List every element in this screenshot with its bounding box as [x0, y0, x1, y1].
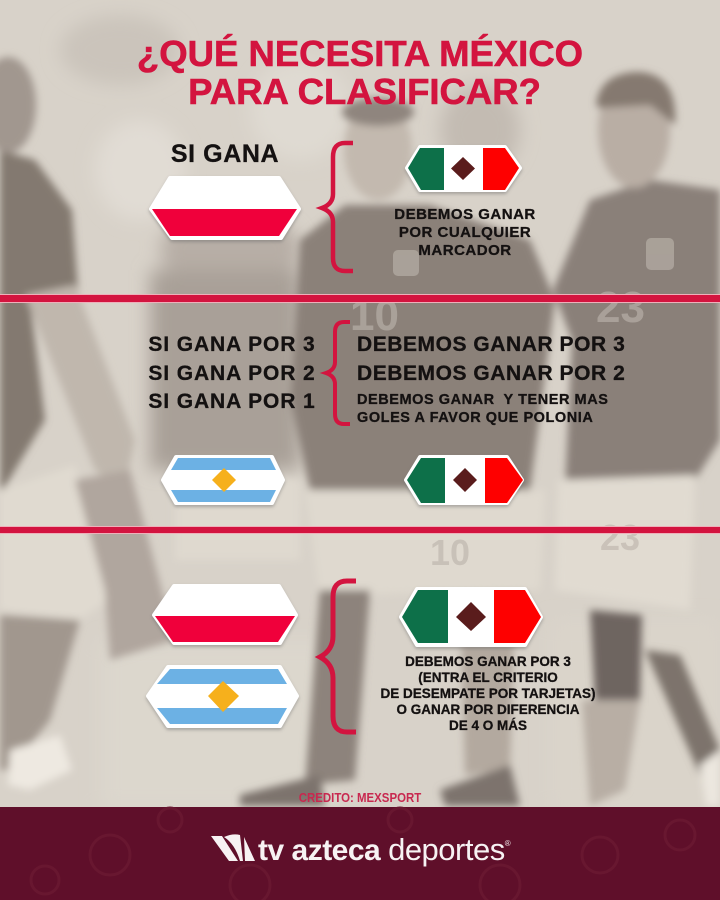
text: third scenario result: O GANAR POR DIFERENCIA [396, 702, 580, 717]
text: first scenario result: DEBEMOS GANAR [394, 206, 536, 223]
title: ¿QUÉ NECESITA MÉXICO [137, 33, 583, 74]
text: second scenario results [357, 333, 625, 384]
shirt numbers, crests: 23 [596, 283, 645, 332]
text: second scenario conditions: SI GANA POR 1 [148, 390, 316, 413]
text: third scenario result [380, 654, 596, 733]
heading: si gana: SI GANA [171, 140, 279, 168]
text: first scenario result [394, 206, 536, 259]
title [137, 33, 583, 112]
text: second scenario tiebreak [357, 392, 608, 426]
shirt numbers, crests: 10 [350, 291, 399, 340]
section divider 1 [0, 295, 720, 302]
text: second scenario tiebreak: GOLES A FAVOR QUE POLONIA [357, 410, 593, 426]
photo credit: CREDITO: MEXSPORT [299, 790, 421, 805]
title: PARA CLASIFICAR? [188, 71, 541, 112]
shirt numbers, crests [350, 238, 674, 573]
section divider 2 [0, 527, 720, 533]
shirt numbers, crests: 10 [430, 532, 470, 573]
text: third scenario result: DE 4 O MÁS [449, 718, 527, 733]
footer band [0, 807, 720, 900]
text: first scenario result: MARCADOR [418, 242, 512, 259]
text: second scenario conditions: SI GANA POR 3 [148, 333, 316, 356]
footer logo: tv azteca deportes [211, 832, 510, 867]
text: third scenario result: (ENTRA EL CRITERIO [418, 670, 558, 685]
text: first scenario result: POR CUALQUIER [399, 224, 531, 241]
text: second scenario tiebreak: DEBEMOS GANAR Y TENER MAS [357, 392, 608, 408]
footer pattern [31, 808, 695, 900]
shirt numbers, crests: 23 [600, 517, 640, 558]
text: second scenario conditions: SI GANA POR 2 [148, 362, 316, 384]
text: second scenario conditions [148, 333, 316, 413]
icon: tv azteca mark [211, 834, 255, 861]
text: third scenario result: DEBEMOS GANAR POR 3 [405, 654, 571, 669]
text: third scenario result: DE DESEMPATE POR TARJETAS) [380, 686, 596, 701]
text: second scenario results: DEBEMOS GANAR POR 2 [357, 362, 625, 384]
text: second scenario results: DEBEMOS GANAR POR 3 [357, 333, 625, 356]
wordmark: tv azteca deportes® [258, 832, 510, 867]
